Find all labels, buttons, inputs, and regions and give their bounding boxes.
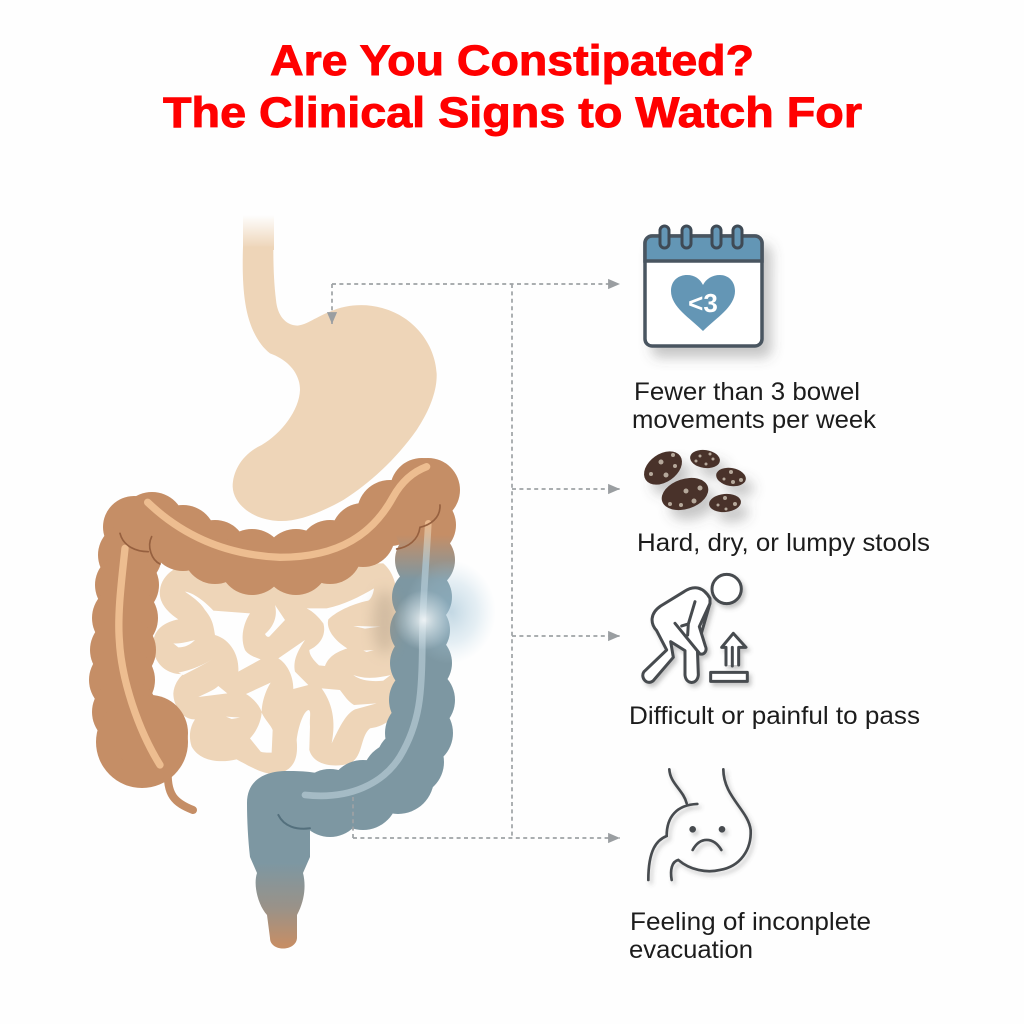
small intestine bbox=[153, 563, 400, 774]
text: fewer than 3 bbox=[632, 378, 877, 434]
text: fewer than 3: movements per week bbox=[632, 406, 877, 434]
title: The Clinical Signs to Watch For bbox=[163, 89, 862, 137]
icon: calendar: <3 bbox=[688, 288, 718, 318]
pain glow bbox=[373, 560, 496, 664]
colon stripes and fold lines bbox=[119, 467, 440, 829]
text: hard stools: Hard, dry, or lumpy stools bbox=[637, 529, 930, 557]
colon descending, sigmoid and rectum bbox=[247, 458, 460, 948]
icon: straining person bbox=[643, 574, 747, 682]
text: fewer than 3: Fewer than 3 bowel bbox=[634, 378, 860, 406]
dotted connector lines bbox=[332, 284, 620, 838]
text: incomplete evacuation: evacuation bbox=[629, 936, 753, 964]
title bbox=[163, 37, 862, 137]
icon: sad stomach bbox=[648, 769, 751, 880]
text: incomplete evacuation bbox=[629, 908, 871, 964]
colon ascending and transverse bbox=[89, 458, 454, 810]
text: incomplete evacuation: Feeling of inconplete bbox=[630, 908, 871, 936]
icon: hard stools bbox=[638, 444, 747, 516]
icon: calendar bbox=[645, 226, 762, 346]
stomach and esophagus bbox=[233, 215, 437, 521]
appendix bbox=[168, 768, 193, 810]
text: difficult to pass: Difficult or painful to pass bbox=[629, 702, 920, 730]
title: Are You Constipated? bbox=[270, 37, 754, 85]
